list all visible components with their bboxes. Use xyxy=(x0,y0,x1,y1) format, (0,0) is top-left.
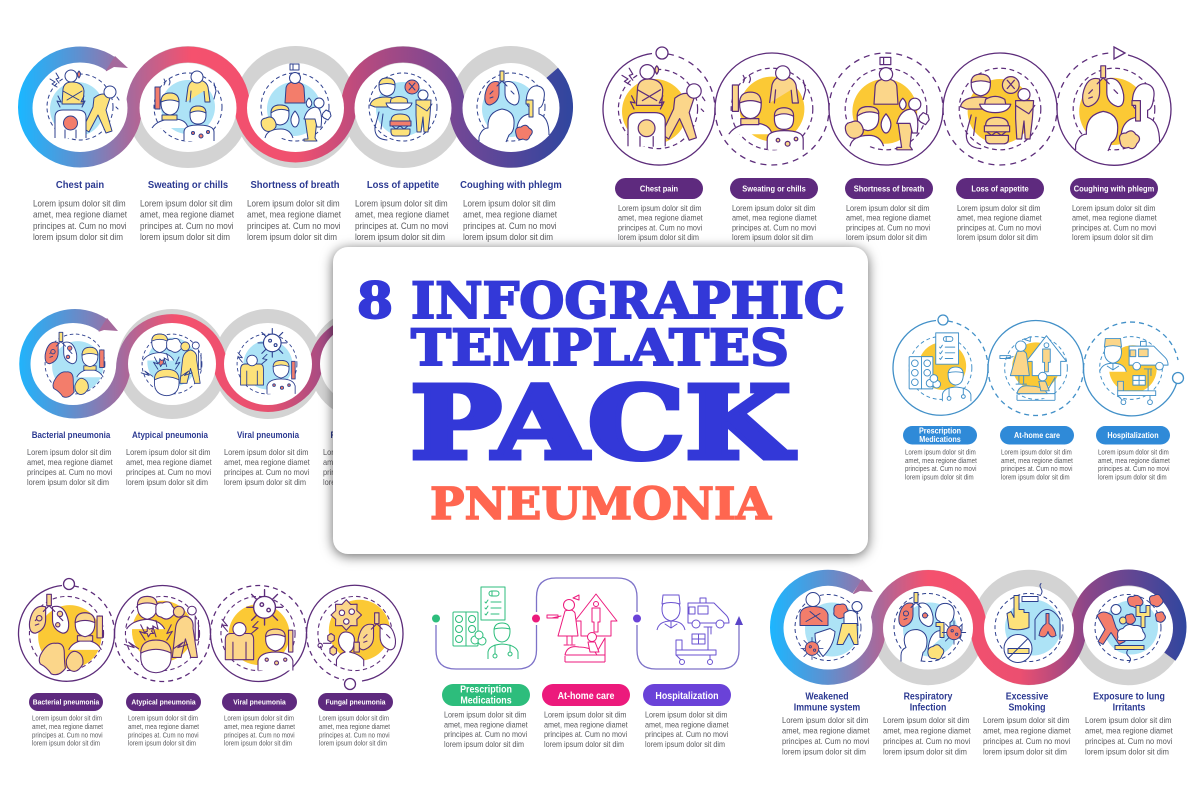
labels: Sweating or chills xyxy=(148,180,229,191)
labels: Fungal pneumonia xyxy=(330,430,402,440)
end arrow xyxy=(1114,47,1125,59)
body text: principes at. Cum no movi xyxy=(957,223,1041,233)
body text: Lorem ipsum dolor sit dim xyxy=(224,715,294,723)
body text: principes at. Cum no movi xyxy=(140,220,234,231)
body text: Lorem ipsum dolor sit dim xyxy=(355,198,448,209)
label pills: Bacterial pneumonia xyxy=(33,697,100,707)
body text: principes at. Cum no movi xyxy=(732,223,816,233)
icon: chest pain xyxy=(47,70,119,140)
arrow head xyxy=(735,616,743,625)
ring centres xyxy=(30,323,408,405)
labels: Immune system xyxy=(794,701,860,713)
ring centres xyxy=(32,64,560,152)
body text: lorem ipsum dolor sit dim xyxy=(544,740,624,749)
body text xyxy=(27,448,409,487)
body text: amet, mea regione diamet xyxy=(1085,726,1173,736)
body text: amet, mea regione diamet xyxy=(140,209,235,220)
icon: excessive smoking xyxy=(995,584,1063,662)
labels: Irritants xyxy=(1113,701,1145,713)
body text: lorem ipsum dolor sit dim xyxy=(33,232,123,242)
body text: amet, mea regione diamet xyxy=(126,458,212,467)
end node xyxy=(1172,372,1184,384)
body text: principes at. Cum no movi xyxy=(355,220,449,231)
connecting line xyxy=(19,585,403,682)
label pills: Shortness of breath xyxy=(854,184,924,194)
icon: at-home care xyxy=(1000,336,1067,400)
label pills xyxy=(903,426,1170,444)
start node xyxy=(938,315,948,325)
labels: Excessive xyxy=(1006,690,1048,702)
panel: pneumonia types ribbon template xyxy=(27,316,412,487)
body text: lorem ipsum dolor sit dim xyxy=(224,740,292,748)
icon: chest pain xyxy=(618,65,705,149)
body text: Lorem ipsum dolor sit dim xyxy=(905,449,976,457)
body text: principes at. Cum no movi xyxy=(905,466,977,473)
label pills: Hospitalization xyxy=(655,691,719,702)
ring centres xyxy=(784,586,1173,670)
body text: principes at. Cum no movi xyxy=(846,223,930,233)
body text: Lorem ipsum dolor sit dim xyxy=(247,198,340,209)
body text: amet, mea regione diamet xyxy=(355,209,450,220)
labels: Atypical pneumonia xyxy=(132,430,208,440)
body text: Lorem ipsum dolor sit dim xyxy=(1085,716,1172,725)
body text: principes at. Cum no movi xyxy=(782,737,869,746)
body text: lorem ipsum dolor sit dim xyxy=(983,747,1067,757)
body text: amet, mea regione diamet xyxy=(544,720,628,729)
body text: lorem ipsum dolor sit dim xyxy=(1072,233,1153,242)
body text: lorem ipsum dolor sit dim xyxy=(1085,747,1169,757)
icon: atypical pneumonia xyxy=(124,596,200,673)
gray rings xyxy=(124,316,412,412)
body text: lorem ipsum dolor sit dim xyxy=(1098,474,1167,482)
node: violet xyxy=(633,614,641,622)
body text: Lorem ipsum dolor sit dim xyxy=(1098,449,1169,457)
icon: coughing with phlegm xyxy=(1073,66,1160,151)
label pills: Sweating or chills xyxy=(742,184,806,194)
body text: lorem ipsum dolor sit dim xyxy=(957,233,1038,242)
body text: amet, mea regione diamet xyxy=(27,458,113,467)
body text: lorem ipsum dolor sit dim xyxy=(618,233,699,242)
body text xyxy=(905,449,1170,482)
body text: Lorem ipsum dolor sit dim xyxy=(1001,449,1072,457)
label pills: Coughing with phlegm xyxy=(1074,184,1154,194)
labels: Smoking xyxy=(1008,701,1046,713)
body text: principes at. Cum no movi xyxy=(126,468,211,477)
body text: Lorem ipsum dolor sit dim xyxy=(128,715,198,723)
body text: Lorem ipsum dolor sit dim xyxy=(126,448,211,457)
icon: at-home care xyxy=(547,594,618,662)
icon: hospitalization xyxy=(657,593,729,664)
body text: principes at. Cum no movi xyxy=(319,732,390,739)
heading: 8 infographic: 8 INFOGRAPHIC xyxy=(357,271,845,330)
body text: lorem ipsum dolor sit dim xyxy=(224,478,306,487)
panel: symptoms ribbon template xyxy=(26,54,565,242)
body text: Lorem ipsum dolor sit dim xyxy=(883,716,970,725)
gray rings xyxy=(879,578,1177,677)
label pills xyxy=(615,178,1158,199)
body text: lorem ipsum dolor sit dim xyxy=(247,232,337,242)
gradient ribbon xyxy=(26,54,565,160)
labels: Weakened xyxy=(805,690,849,702)
body text: lorem ipsum dolor sit dim xyxy=(645,740,725,749)
panel: risk factors ribbon template xyxy=(778,577,1178,757)
body text: Lorem ipsum dolor sit dim xyxy=(32,715,102,723)
body text: Lorem ipsum dolor sit dim xyxy=(957,204,1040,213)
label pills xyxy=(29,693,393,711)
panel: treatment colour template xyxy=(432,578,743,749)
label pills: Prescription xyxy=(919,426,961,436)
panel: pneumonia types outline template xyxy=(19,578,403,748)
body text: principes at. Cum no movi xyxy=(645,730,728,739)
label pills: Loss of appetite xyxy=(971,184,1029,194)
labels: Chest pain xyxy=(56,180,104,191)
body text: principes at. Cum no movi xyxy=(224,732,295,739)
body text: principes at. Cum no movi xyxy=(463,220,557,231)
end node xyxy=(344,678,356,690)
icon: fungal pneumonia xyxy=(318,596,395,671)
labels: Exposure to lung xyxy=(1093,690,1165,702)
icon: sweating or chills xyxy=(729,66,813,150)
icon: atypical pneumonia xyxy=(141,334,202,396)
body text xyxy=(618,204,1157,242)
body text: lorem ipsum dolor sit dim xyxy=(444,740,524,749)
labels xyxy=(56,180,562,191)
node: green xyxy=(432,614,440,622)
panel: symptoms outline template xyxy=(603,47,1171,242)
body text: amet, mea regione diamet xyxy=(983,726,1071,736)
icon: shortness of breath xyxy=(845,57,929,150)
body text: lorem ipsum dolor sit dim xyxy=(1001,474,1070,482)
title card xyxy=(333,247,868,554)
body text: principes at. Cum no movi xyxy=(544,730,627,739)
body text: principes at. Cum no movi xyxy=(1098,466,1170,473)
body text: principes at. Cum no movi xyxy=(128,732,199,739)
icon: prescription medications xyxy=(453,587,519,659)
body text: lorem ipsum dolor sit dim xyxy=(140,232,230,242)
body text: amet, mea regione diamet xyxy=(444,720,528,729)
body text: lorem ipsum dolor sit dim xyxy=(905,474,974,482)
body text: principes at. Cum no movi xyxy=(983,737,1070,746)
body text: amet, mea regione diamet xyxy=(32,724,103,731)
icon: exposure to lung irritants xyxy=(1095,594,1166,662)
body text: Lorem ipsum dolor sit dim xyxy=(732,204,815,213)
connecting line xyxy=(603,53,1171,165)
label pills: Hospitalization xyxy=(1107,431,1159,440)
icon: fungal pneumonia xyxy=(334,334,397,394)
label pills xyxy=(442,684,731,707)
icon: bacterial pneumonia xyxy=(29,594,104,675)
label pills: Viral pneumonia xyxy=(233,697,287,707)
body text: lorem ipsum dolor sit dim xyxy=(319,740,387,748)
body text: Lorem ipsum dolor sit dim xyxy=(618,204,701,213)
icon: shortness of breath xyxy=(261,64,331,141)
body text: amet, mea regione diamet xyxy=(883,726,971,736)
body text: Lorem ipsum dolor sit dim xyxy=(224,448,309,457)
gradient ribbon xyxy=(27,316,412,411)
labels xyxy=(32,430,402,440)
panel: treatment blue template xyxy=(893,315,1184,482)
body text xyxy=(32,715,390,748)
labels xyxy=(794,690,1165,713)
body text: amet, mea regione diamet xyxy=(224,724,295,731)
body text: Lorem ipsum dolor sit dim xyxy=(319,715,389,723)
labels: Bacterial pneumonia xyxy=(32,430,111,440)
body text: amet, mea regione diamet xyxy=(846,213,931,223)
icon: weakened immune system xyxy=(795,592,862,660)
body text: lorem ipsum dolor sit dim xyxy=(126,478,208,487)
labels: Infection xyxy=(910,701,947,713)
icon: loss of appetite xyxy=(369,73,437,141)
body text: principes at. Cum no movi xyxy=(1072,223,1156,233)
body text: Lorem ipsum dolor sit dim xyxy=(27,448,112,457)
label pills: Atypical pneumonia xyxy=(131,697,197,707)
labels: Coughing with phlegm xyxy=(460,180,562,191)
body text: Lorem ipsum dolor sit dim xyxy=(983,716,1070,725)
body text: principes at. Cum no movi xyxy=(444,730,527,739)
body text: Lorem ipsum dolor sit dim xyxy=(544,710,626,720)
heading: pack: PACK xyxy=(410,364,795,482)
body text: amet, mea regione diamet xyxy=(128,724,199,731)
connecting line xyxy=(893,320,1178,416)
body text: principes at. Cum no movi xyxy=(27,468,112,477)
body text: amet, mea regione diamet xyxy=(645,720,729,729)
body text: amet, mea regione diamet xyxy=(957,213,1042,223)
body text: amet, mea regione diamet xyxy=(319,724,390,731)
icon: loss of appetite xyxy=(959,68,1041,150)
body text: lorem ipsum dolor sit dim xyxy=(27,478,109,487)
start node xyxy=(656,47,668,59)
body text: amet, mea regione diamet xyxy=(905,458,977,465)
body text: lorem ipsum dolor sit dim xyxy=(782,747,866,757)
label pills: At-home care xyxy=(558,691,614,702)
icon: respiratory infection xyxy=(894,592,966,662)
body text: lorem ipsum dolor sit dim xyxy=(883,747,967,757)
body text: amet, mea regione diamet xyxy=(782,726,870,736)
gray rings xyxy=(135,54,564,160)
body text: Lorem ipsum dolor sit dim xyxy=(782,716,869,725)
body text: lorem ipsum dolor sit dim xyxy=(355,232,445,242)
label pills: Medications xyxy=(460,695,512,707)
body text: principes at. Cum no movi xyxy=(883,737,970,746)
body text: principes at. Cum no movi xyxy=(33,220,127,231)
body text: Lorem ipsum dolor sit dim xyxy=(444,710,526,720)
icon: viral pneumonia xyxy=(237,329,297,394)
label pills: Fungal pneumonia xyxy=(325,697,386,707)
labels: Loss of appetite xyxy=(367,180,440,191)
icon: coughing with phlegm xyxy=(477,71,549,142)
connecting line xyxy=(436,578,739,669)
body text: Lorem ipsum dolor sit dim xyxy=(463,198,556,209)
label pills: Chest pain xyxy=(640,184,678,194)
body text xyxy=(33,198,558,242)
body text xyxy=(782,716,1173,757)
start node xyxy=(64,578,74,590)
icon: hospitalization xyxy=(1100,337,1168,405)
body text: lorem ipsum dolor sit dim xyxy=(323,478,405,487)
body text: principes at. Cum no movi xyxy=(32,732,103,739)
card background xyxy=(333,247,868,554)
label pills: Medications xyxy=(919,435,961,444)
body text: lorem ipsum dolor sit dim xyxy=(846,233,927,242)
body text xyxy=(444,710,729,749)
body text: Lorem ipsum dolor sit dim xyxy=(140,198,233,209)
body text: amet, mea regione diamet xyxy=(463,209,558,220)
labels: Viral pneumonia xyxy=(237,430,299,440)
body text: principes at. Cum no movi xyxy=(618,223,702,233)
body text: principes at. Cum no movi xyxy=(1001,466,1073,473)
body text: Lorem ipsum dolor sit dim xyxy=(323,448,408,457)
body text: amet, mea regione diamet xyxy=(224,458,310,467)
icon: sweating or chills xyxy=(152,71,222,141)
body text: Lorem ipsum dolor sit dim xyxy=(846,204,929,213)
icon: viral pneumonia xyxy=(221,590,295,671)
body text: principes at. Cum no movi xyxy=(1085,737,1172,746)
body text: principes at. Cum no movi xyxy=(323,468,408,477)
body text: Lorem ipsum dolor sit dim xyxy=(33,198,126,209)
label pills: At-home care xyxy=(1014,431,1060,440)
body text: lorem ipsum dolor sit dim xyxy=(32,740,100,748)
body text: principes at. Cum no movi xyxy=(247,220,341,231)
body text: amet, mea regione diamet xyxy=(1072,213,1157,223)
body text: amet, mea regione diamet xyxy=(732,213,817,223)
body text: amet, mea regione diamet xyxy=(323,458,409,467)
node: pink xyxy=(532,614,540,622)
body text: amet, mea regione diamet xyxy=(1001,458,1073,465)
heading: templates: TEMPLATES xyxy=(411,318,789,377)
icon: prescription medications xyxy=(909,333,972,401)
body text: lorem ipsum dolor sit dim xyxy=(732,233,813,242)
body text: amet, mea regione diamet xyxy=(33,209,128,220)
body text: lorem ipsum dolor sit dim xyxy=(128,740,196,748)
labels: Respiratory xyxy=(904,690,953,702)
label pills: Prescription xyxy=(460,684,512,696)
body text: amet, mea regione diamet xyxy=(247,209,342,220)
body text: Lorem ipsum dolor sit dim xyxy=(1072,204,1155,213)
body text: Lorem ipsum dolor sit dim xyxy=(645,710,727,720)
icon: bacterial pneumonia xyxy=(45,332,105,397)
body text: lorem ipsum dolor sit dim xyxy=(463,232,553,242)
gradient ribbon xyxy=(778,577,1178,677)
body text: principes at. Cum no movi xyxy=(224,468,309,477)
labels: Shortness of breath xyxy=(250,180,340,191)
body text: amet, mea regione diamet xyxy=(1098,458,1170,465)
heading: pneumonia: PNEUMONIA xyxy=(430,479,772,530)
body text: amet, mea regione diamet xyxy=(618,213,703,223)
